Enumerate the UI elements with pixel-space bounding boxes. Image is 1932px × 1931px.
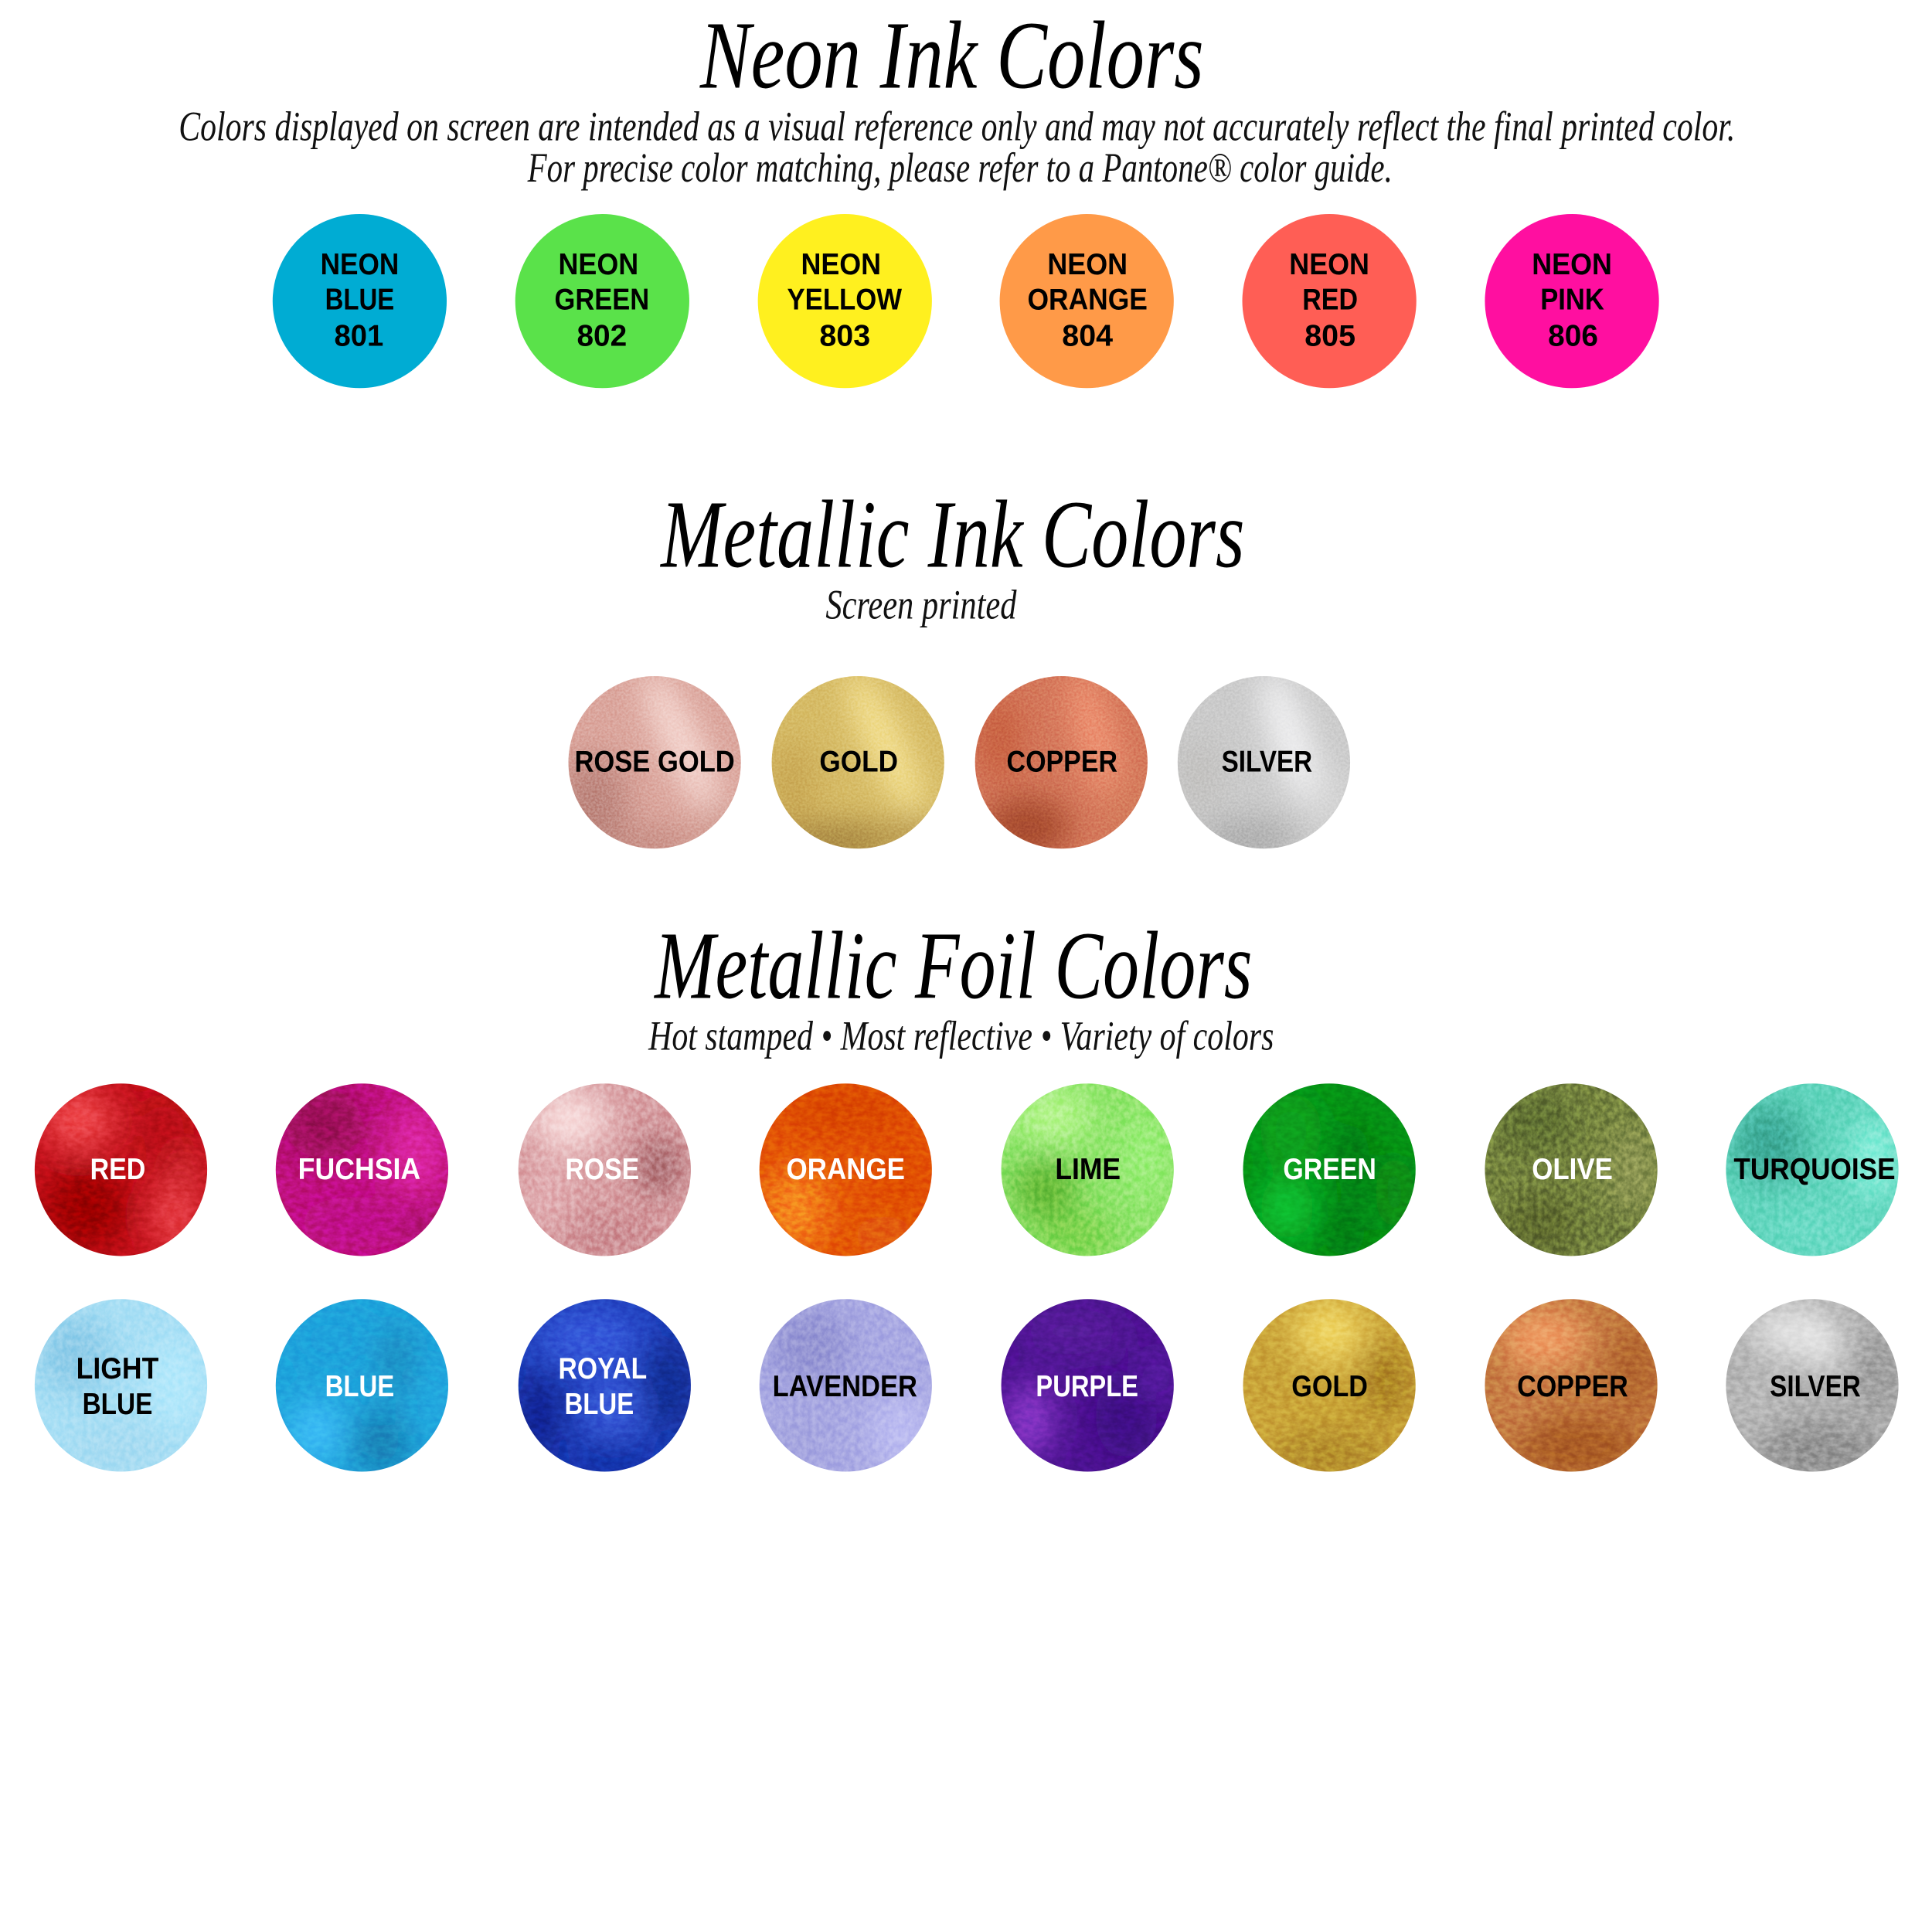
swatch: silver ink: SILVER bbox=[1222, 746, 1312, 779]
swatch: neon orange 804: ORANGE bbox=[1027, 284, 1148, 317]
swatch: neon yellow 803: YELLOW bbox=[787, 284, 902, 317]
swatch: neon red 805: NEON bbox=[1289, 248, 1369, 281]
section: metallic foil colors bbox=[34, 913, 1900, 1481]
swatch: lavender foil bbox=[759, 1298, 933, 1472]
swatch: neon green 802: GREEN bbox=[555, 284, 649, 317]
page content bbox=[34, 2, 1900, 1481]
swatch: neon orange 804: NEON bbox=[1047, 248, 1128, 281]
swatch: copper foil bbox=[1484, 1298, 1658, 1474]
swatch: neon blue 801: NEON bbox=[321, 248, 399, 281]
swatch: neon pink 806: 806 bbox=[1548, 319, 1598, 352]
swatch: rose gold ink bbox=[569, 676, 741, 848]
swatch: neon green 802: NEON bbox=[559, 248, 638, 281]
swatch: rose foil: ROSE bbox=[566, 1153, 639, 1186]
subtitle: screen printed: Screen printed bbox=[825, 581, 1017, 627]
swatch: neon blue 801 bbox=[273, 214, 447, 388]
swatch: orange foil: ORANGE bbox=[787, 1153, 905, 1186]
swatch: lime foil: LIME bbox=[1055, 1153, 1121, 1186]
swatch: green foil bbox=[1243, 1083, 1417, 1258]
swatch: gold foil bbox=[1243, 1298, 1417, 1477]
swatch: neon orange 804: 804 bbox=[1062, 319, 1113, 352]
swatch: royal blue foil: ROYAL bbox=[559, 1352, 647, 1385]
swatch: neon pink 806: PINK bbox=[1540, 284, 1604, 317]
swatch: rose foil bbox=[518, 1083, 692, 1258]
swatch: blue foil bbox=[275, 1298, 451, 1474]
swatch: red foil: RED bbox=[90, 1153, 145, 1186]
swatch: light blue foil: BLUE bbox=[83, 1388, 152, 1421]
swatch: neon blue 801: 801 bbox=[335, 319, 383, 352]
swatch: neon green 802 bbox=[515, 214, 689, 388]
swatch: red foil bbox=[34, 1083, 208, 1256]
subtitle: foil properties: Hot stamped • Most reflective • Variety of colors bbox=[648, 1012, 1274, 1059]
swatch: silver foil bbox=[1725, 1298, 1900, 1477]
swatch: gold ink bbox=[771, 676, 944, 848]
swatch: neon blue 801: BLUE bbox=[325, 284, 394, 317]
swatch: neon red 805 bbox=[1243, 214, 1417, 388]
swatch: neon orange 804 bbox=[1000, 214, 1174, 388]
section: metallic ink colors bbox=[569, 499, 1350, 848]
swatch: olive foil: OLIVE bbox=[1532, 1153, 1613, 1186]
swatch: neon pink 806 bbox=[1485, 214, 1659, 388]
swatch: neon yellow 803: NEON bbox=[801, 248, 881, 281]
swatch: light blue foil: LIGHT bbox=[77, 1352, 159, 1385]
swatch: fuchsia foil bbox=[275, 1083, 449, 1256]
swatch: rose gold ink: ROSE GOLD bbox=[574, 746, 735, 779]
swatch: gold ink: GOLD bbox=[819, 746, 898, 779]
swatch: copper foil: COPPER bbox=[1517, 1370, 1628, 1403]
swatch: neon red 805: RED bbox=[1302, 284, 1358, 317]
title: neon ink colors: Neon Ink Colors bbox=[699, 2, 1204, 110]
swatch: copper ink bbox=[975, 676, 1148, 848]
swatch: copper ink: COPPER bbox=[1007, 746, 1117, 779]
swatch: light blue foil bbox=[34, 1298, 208, 1474]
swatch: neon yellow 803: 803 bbox=[819, 319, 870, 352]
swatch: neon yellow 803 bbox=[758, 214, 932, 388]
disclaimer text: For precise color matching, please refer to a Pantone® color guide. bbox=[527, 144, 1393, 191]
section: neon ink colors bbox=[179, 2, 1735, 388]
title: metallic ink colors: Metallic Ink Colors bbox=[660, 481, 1245, 588]
swatch: turquoise foil bbox=[1725, 1083, 1900, 1258]
swatch: neon pink 806: NEON bbox=[1532, 248, 1612, 281]
swatch: lavender foil: LAVENDER bbox=[773, 1370, 917, 1403]
swatch: silver foil: SILVER bbox=[1770, 1370, 1861, 1403]
swatch: silver ink bbox=[1178, 676, 1350, 848]
swatch: orange foil bbox=[759, 1083, 933, 1256]
swatch: green foil: GREEN bbox=[1283, 1153, 1376, 1186]
swatch: olive foil bbox=[1484, 1083, 1658, 1256]
swatch: royal blue foil bbox=[516, 1298, 692, 1481]
swatch: neon green 802: 802 bbox=[577, 319, 627, 352]
swatch: blue foil: BLUE bbox=[325, 1370, 394, 1403]
swatch: neon red 805: 805 bbox=[1304, 319, 1355, 352]
swatch: royal blue foil: BLUE bbox=[565, 1388, 634, 1421]
swatch: purple foil: PURPLE bbox=[1036, 1370, 1138, 1403]
swatch: lime foil bbox=[1001, 1083, 1175, 1258]
swatch: fuchsia foil: FUCHSIA bbox=[298, 1153, 420, 1186]
disclaimer text bbox=[179, 103, 1735, 191]
swatch: gold foil: GOLD bbox=[1291, 1370, 1368, 1403]
title: metallic foil colors: Metallic Foil Colors bbox=[654, 913, 1252, 1020]
swatch: turquoise foil: TURQUOISE bbox=[1733, 1153, 1896, 1186]
swatch: purple foil bbox=[1001, 1298, 1175, 1472]
